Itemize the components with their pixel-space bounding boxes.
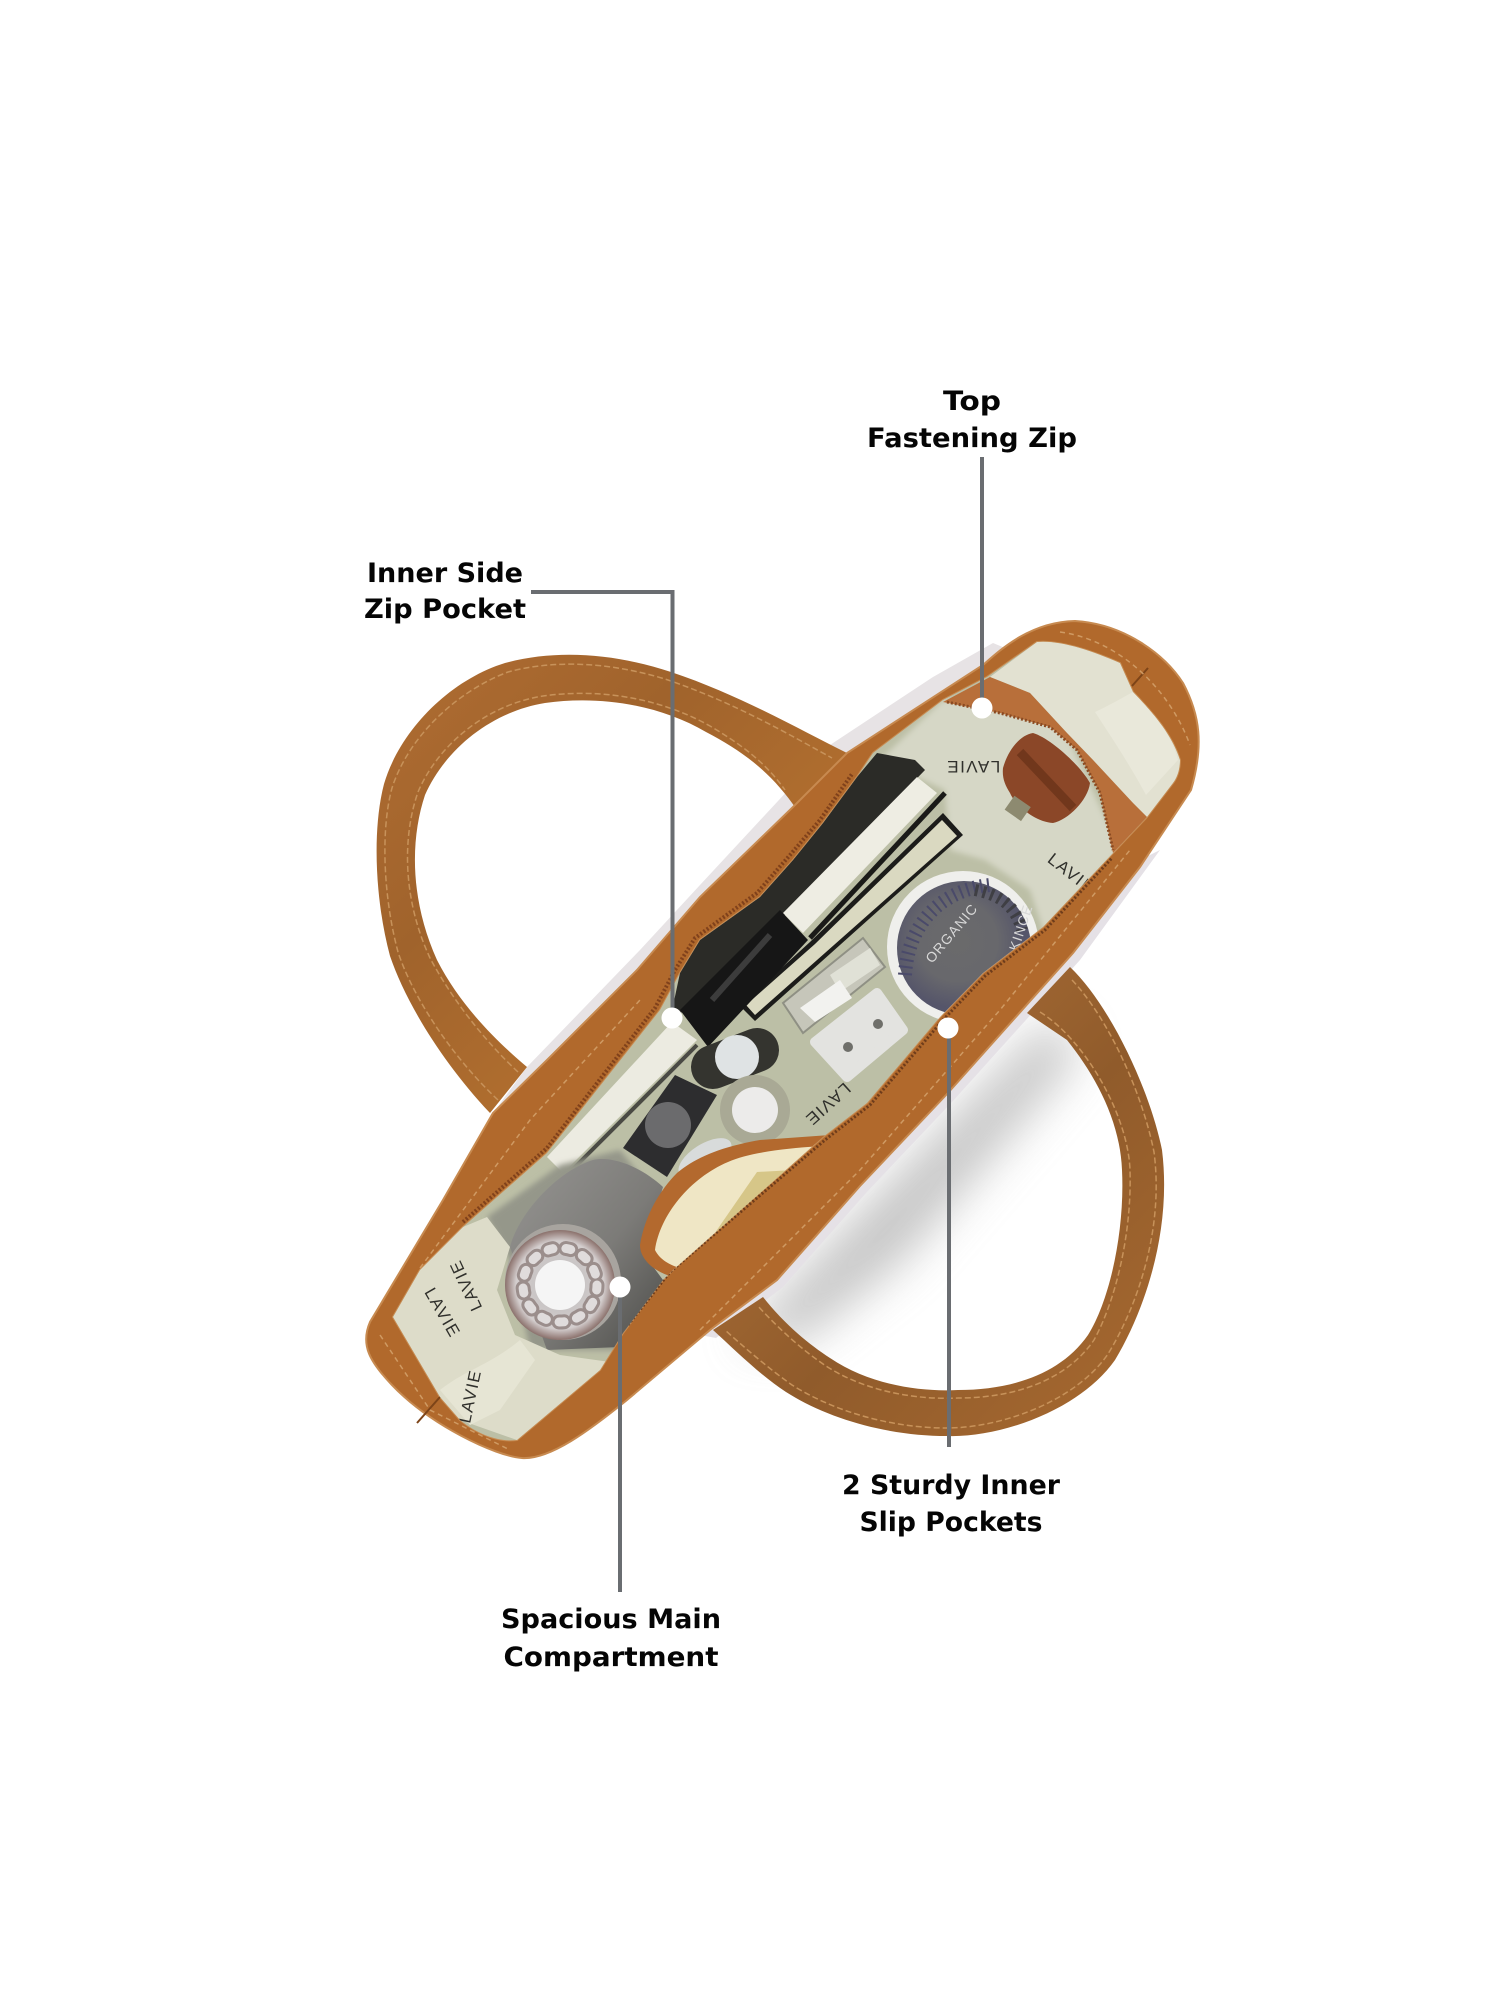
lining logo prints: LAVIE — [801, 1079, 854, 1129]
label: inner side zip pocket: Inner Side — [367, 558, 523, 589]
marker dot — [662, 1008, 682, 1028]
marker dot — [610, 1276, 630, 1298]
charger — [783, 938, 885, 1033]
lining logo prints: LAVIE — [446, 1257, 486, 1314]
label: spacious main compartment: Spacious Main — [501, 1604, 721, 1635]
leather rim — [366, 621, 1199, 1458]
bag side panels — [493, 643, 1160, 1338]
upper notebook back cover — [670, 753, 925, 1020]
leader line — [531, 592, 672, 1019]
upper lining end — [990, 642, 1180, 817]
upper notebook pages — [783, 777, 937, 933]
lining logo prints: LAVIE — [421, 1284, 464, 1341]
lining floor — [393, 642, 1180, 1440]
flask and shaded area — [487, 1130, 738, 1350]
lower lining end — [393, 1217, 610, 1440]
small bottles — [713, 1035, 790, 1145]
leader line — [947, 1028, 951, 1447]
lining logo prints: LAVIE — [455, 1368, 485, 1425]
zipper teeth — [947, 702, 1113, 850]
label: top fastening zip: Fastening Zip — [867, 423, 1077, 454]
candle tin: ORGANIC — [922, 900, 981, 966]
second notebook — [740, 813, 963, 1021]
marker dot — [972, 698, 992, 718]
product illustration: open tote bag viewed from above — [360, 620, 1220, 1480]
callout: inner side zip pocket — [364, 558, 682, 1028]
marker dot — [938, 1018, 958, 1038]
pen loop — [680, 910, 808, 1047]
lower notebook pages — [547, 1022, 697, 1173]
lining logo prints: LAVIE — [1044, 849, 1099, 898]
pocket — [640, 1135, 830, 1277]
upper lining floor — [880, 700, 1120, 935]
label: top fastening zip: Top — [943, 386, 1001, 417]
zip strip — [943, 677, 1147, 853]
label: spacious main compartment: Compartment — [504, 1642, 719, 1673]
travel adapter — [815, 993, 903, 1077]
candle tin: KINCE — [1006, 903, 1036, 953]
label: 2 sturdy inner slip pockets: Slip Pockets — [860, 1507, 1042, 1538]
lower right handle — [713, 967, 1164, 1436]
leather pouch — [1003, 733, 1090, 823]
label: 2 sturdy inner slip pockets: 2 Sturdy Inner — [842, 1470, 1061, 1501]
upper left handle — [377, 655, 847, 1113]
black compact box — [623, 1075, 717, 1177]
cast shadow — [740, 1020, 1080, 1340]
label: inner side zip pocket: Zip Pocket — [364, 594, 526, 625]
candle tin — [887, 871, 1039, 1023]
lining logo prints: LAVIE — [946, 757, 1000, 776]
leader line — [980, 457, 984, 708]
notebook spine line — [810, 793, 945, 938]
lining logo prints — [421, 757, 1099, 1425]
bottle cap — [505, 1224, 621, 1340]
bag interior — [393, 642, 1180, 1440]
leader line — [618, 1287, 622, 1592]
notebook edge shadow — [574, 1044, 698, 1166]
callout: spacious main compartment — [501, 1276, 721, 1673]
callout: top fastening zip — [867, 386, 1077, 718]
callout: sturdy inner slip pockets — [842, 1018, 1061, 1538]
